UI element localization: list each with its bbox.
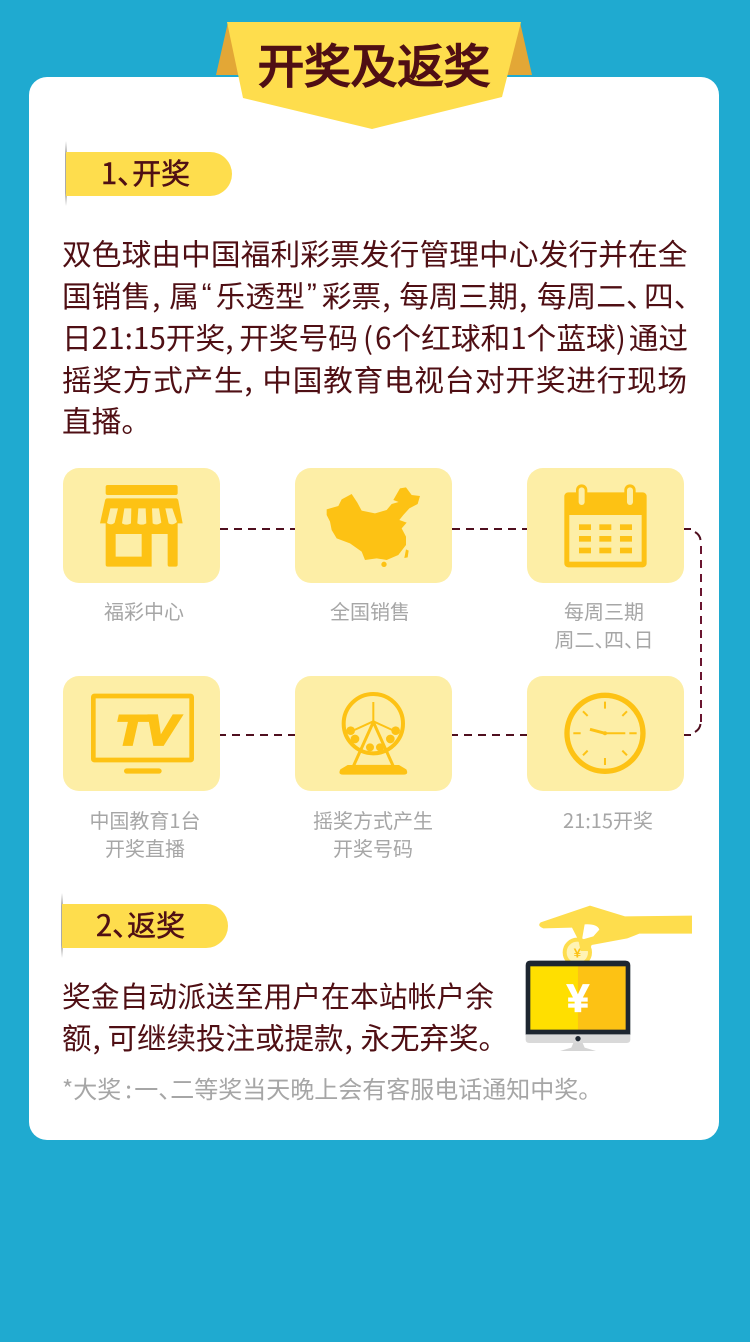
section 1 body text: 日21:15开奖 开奖号码 6个红球和1个蓝球 通过 (62, 315, 688, 358)
section 1 marker bar (65, 141, 67, 206)
monitor: ¥ (567, 977, 589, 1021)
icon: television: TV (116, 707, 182, 753)
white card panel (29, 77, 719, 1140)
section 2 heading (62, 904, 228, 948)
step box: draw machine (295, 676, 452, 791)
label: three draws weekly: 周二 四 日 (554, 624, 654, 653)
section 2 heading: 2 返奖 (96, 903, 185, 945)
footnote: *大奖 一 二等奖当天晚上会有客服电话通知中奖。 (62, 1070, 602, 1105)
label: three draws weekly (554, 596, 654, 653)
label: draw machine: 开奖号码 (333, 833, 413, 862)
section 1 heading: 1 开奖 (101, 151, 190, 193)
label: three draws weekly: 、 (594, 624, 614, 653)
section 1 heading: 、 (117, 151, 146, 193)
section 1 body text: 直播。 (62, 398, 151, 441)
step box: three draws weekly (527, 468, 684, 583)
section 1 body text: , (382, 273, 390, 316)
label: draw machine (313, 805, 433, 862)
section 1 body text: , (152, 273, 160, 316)
hand (539, 906, 692, 951)
step box: draw time (527, 676, 684, 791)
step box: TV broadcast (63, 676, 220, 791)
section 1 body text: ( (363, 315, 373, 358)
section 1 body text: 、 (626, 273, 656, 316)
section 1 body text: ) (616, 315, 626, 358)
footnote: 、 (158, 1070, 182, 1105)
section 1 body text (62, 231, 703, 441)
section 2 heading: 、 (112, 903, 141, 945)
label: TV broadcast: 开奖直播 (105, 833, 185, 862)
section 1 heading (66, 152, 232, 196)
label: draw time: 21:15开奖 (563, 805, 653, 834)
label: draw machine: 摇奖方式产生 (313, 805, 433, 834)
coin: ¥ (574, 945, 582, 960)
title: 开奖及返奖 (258, 30, 490, 97)
section 1 body text: “ (202, 278, 212, 311)
label: nationwide sales: 全国销售 (330, 596, 410, 625)
section 1 body text: , (519, 273, 527, 316)
label: TV broadcast: 中国教育1台 (89, 805, 201, 834)
section 2 body text: 奖金自动派送至用户在本站帐户余 (62, 975, 494, 1016)
label: TV broadcast (89, 805, 201, 862)
label: three draws weekly: 每周三期 (564, 596, 644, 625)
title ribbon (216, 22, 532, 129)
section 1 body text: ” (307, 278, 317, 311)
section 1 body text: 、 (674, 273, 703, 316)
section 2 body text: , (345, 1016, 353, 1058)
section 2 marker bar (61, 893, 63, 958)
label: lottery centre: 福彩中心 (104, 596, 184, 625)
step box: lottery centre (63, 468, 220, 583)
label: three draws weekly: 、 (624, 624, 644, 653)
section 1 body text: , (244, 357, 253, 400)
step box: nationwide sales (295, 468, 452, 583)
section 1 body text: 国销售 属 乐透型 彩票 每周三期 每周二 四 (62, 273, 674, 316)
footnote: : (125, 1070, 132, 1105)
section 2 body text (62, 975, 508, 1058)
section 1 body text: 摇奖方式产生 中国教育电视台对开奖进行现场 (62, 357, 688, 400)
section 2 body text: , (93, 1016, 101, 1058)
section 1 body text: , (225, 315, 234, 358)
section 2 body text: 额 可继续投注或提款 永无弃奖。 (62, 1016, 508, 1058)
coin (565, 940, 590, 965)
monitor (526, 961, 630, 1051)
section 1 body text: 双色球由中国福利彩票发行管理中心发行并在全 (62, 231, 688, 274)
